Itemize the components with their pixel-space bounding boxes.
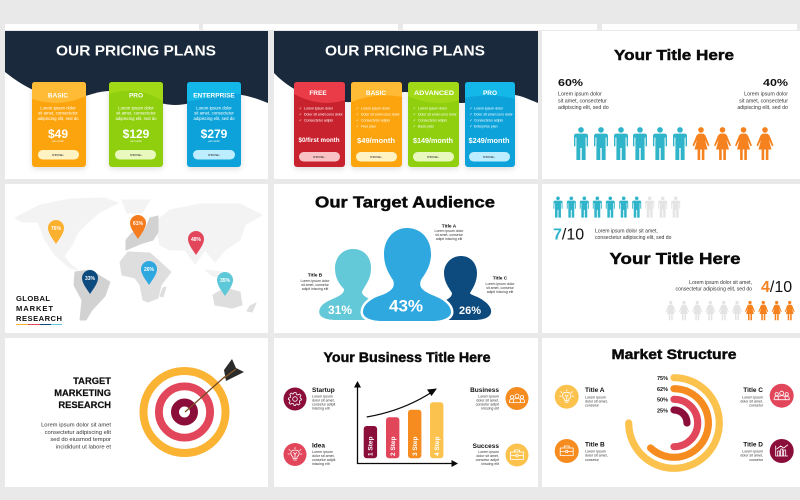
bar chart	[364, 402, 443, 458]
success item	[473, 443, 528, 466]
stat: 40%: 40%	[763, 78, 788, 89]
item: title A	[555, 385, 608, 409]
item: title C: Title C	[743, 387, 763, 394]
text: 4/10 description: consectetur adipiscing elit, sed do	[676, 286, 752, 292]
card: basic: CHOOSE ›	[52, 154, 64, 157]
card: pro	[109, 82, 163, 167]
card: enterprise: per month	[208, 140, 220, 143]
startup item: consetur adipit	[312, 402, 335, 406]
item: title C: consetur	[749, 404, 764, 408]
card: basic: Lorem ipsum dolor	[361, 106, 391, 110]
text: 7/10 description: consectetur adipiscing elit, sed do	[595, 235, 672, 241]
icons: men row	[574, 127, 687, 160]
business item: dolor sit amet,	[476, 398, 499, 402]
card: enterprise: adipiscing elit, sed do	[193, 116, 235, 121]
stat: 60%	[558, 78, 609, 111]
stat: 40%: Lorem ipsum dolor	[744, 92, 788, 98]
arrow: growth curve	[367, 388, 437, 417]
pin: 33%	[82, 270, 98, 294]
pin: 48%: 48%	[191, 237, 202, 243]
text: 7/10 description: Lorem ipsum dolor sit amet,	[595, 228, 658, 234]
heading: Our Target Audience	[315, 194, 495, 212]
label: title B	[301, 272, 330, 291]
card: basic	[351, 82, 402, 167]
card: basic: Dolor sit amet cons dolor	[361, 112, 401, 116]
label: title B: adipit iniscing elit	[302, 287, 328, 291]
card: basic: adipiscing elit, sed do	[37, 116, 79, 121]
card: pro: $249/month	[468, 138, 510, 145]
card: basic: Lorem ipsum dolor	[40, 106, 76, 110]
label: title C: Title C	[493, 276, 508, 282]
panel: pricing plans four tiers	[274, 31, 538, 179]
pin: 61%	[130, 215, 146, 239]
card: free: ✓	[299, 106, 302, 110]
item: title B: dolor sit amet,	[585, 454, 608, 458]
card: advanced: Basic plan	[418, 124, 434, 128]
card: pro: ✓	[470, 112, 472, 116]
card: free: ✓	[299, 118, 302, 122]
card: basic: per month	[52, 140, 64, 143]
item: title C: Lorem ipsum	[742, 396, 763, 400]
label: title A: adipit iniscing elit	[436, 237, 462, 241]
card: advanced: ✓	[413, 124, 416, 128]
pin: 33%: 33%	[85, 276, 96, 282]
heading: TARGET	[73, 375, 111, 386]
card: enterprise: Lorem ipsum dolor	[196, 106, 232, 110]
label: title C: Lorem ipsum dolor	[486, 282, 515, 286]
pin: 26%: 26%	[144, 267, 155, 273]
startup item	[284, 387, 335, 410]
card: free: Lorem ipsum dolor	[304, 106, 334, 110]
card: pro: CHOOSE ›	[483, 156, 495, 159]
card: advanced: Lorem ipsum dolor	[418, 106, 448, 110]
startup item: dolor sit amet,	[312, 398, 335, 402]
dark header wave	[5, 31, 268, 105]
stat: 60%: sit amet, consectetur	[558, 98, 607, 104]
card: enterprise: CHOOSE ›	[208, 154, 220, 157]
heading: OUR PRICING PLANS	[325, 42, 485, 60]
map title: MARKET	[16, 304, 53, 313]
card: advanced: CHOOSE ›	[427, 156, 439, 159]
label: title A	[435, 224, 464, 241]
title underline	[16, 324, 62, 325]
card: basic: BASIC	[366, 90, 386, 97]
top slide strips	[5, 24, 797, 30]
card: free: Consectetur adipis	[304, 118, 333, 122]
pin: 61%: 61%	[133, 221, 144, 227]
body text: incididunt ut labore et	[56, 444, 111, 450]
card: pro: ✓	[470, 118, 472, 122]
panel: business chart	[274, 338, 538, 487]
business item: Business	[470, 387, 499, 394]
card: basic: CHOOSE ›	[370, 156, 382, 159]
chart labels: 25%	[657, 409, 668, 415]
card: pro: ✓	[470, 106, 472, 110]
idea item	[284, 442, 335, 466]
card: free: ✓	[299, 112, 302, 116]
business item: consetur adipit	[476, 402, 499, 406]
bar chart: 1 Step	[368, 436, 374, 456]
map title: RESEARCH	[16, 314, 62, 323]
item: title B: Lorem ipsum	[585, 450, 606, 454]
card: enterprise	[187, 82, 241, 167]
pin: 48%	[188, 231, 204, 255]
heading: Your Business Title Here	[324, 350, 491, 365]
startup item: Startup	[312, 387, 335, 394]
card: pro: PRO	[129, 92, 143, 100]
panel: market structure	[542, 338, 800, 487]
business item: Lorem ipsum	[478, 394, 499, 398]
stat: 60%: 60%	[558, 78, 583, 89]
person A	[363, 228, 451, 321]
card: advanced: ✓	[413, 118, 416, 122]
card: pro: Enterprise plan	[474, 124, 498, 128]
item: title A: Title A	[585, 387, 605, 394]
text: 4/10 description: Lorem ipsum dolor sit amet,	[689, 280, 752, 286]
card: basic: $49/month	[357, 138, 395, 145]
item: title D: dolor sit amet,	[740, 454, 763, 458]
card: basic: sit amet, consectetur	[38, 110, 78, 116]
card: advanced	[408, 82, 459, 167]
card: pro	[465, 82, 515, 167]
item: title A: consetur	[585, 404, 600, 408]
idea item: iniscing elit	[312, 462, 330, 466]
card: advanced: $149/month	[413, 138, 453, 145]
pin: 76%	[48, 220, 64, 244]
value: 43%: 43%	[389, 296, 423, 316]
idea item: dolor sit amet,	[312, 454, 335, 458]
card: pro: Consectetur adipis	[474, 118, 503, 122]
icons: women row	[692, 127, 774, 160]
card: basic: $49	[48, 127, 68, 141]
label: title B: Title B	[308, 272, 323, 278]
label: title A: Title A	[442, 224, 457, 230]
item: title B: Title B	[585, 442, 605, 448]
person B	[319, 249, 385, 320]
success item: Lorem ipsum	[478, 450, 499, 454]
chart labels: 75%	[657, 376, 668, 382]
card: pro: ✓	[470, 124, 472, 128]
item: title A: dolor sit amet,	[585, 400, 608, 404]
card: pro: per month	[130, 140, 142, 143]
label: title B: sit amet, consetur	[301, 283, 330, 287]
bar chart: 2 Step	[390, 436, 397, 456]
item: title A: Lorem ipsum	[585, 396, 606, 400]
item: title C: dolor sit amet,	[740, 400, 763, 404]
idea item: Idea	[312, 442, 325, 450]
card: basic	[32, 82, 86, 167]
heading: Your Title Here	[610, 251, 741, 268]
card: free: FREE	[309, 90, 327, 97]
chart labels: 62%	[657, 387, 668, 393]
heading: RESEARCH	[58, 399, 111, 410]
bar chart: 4 Step	[434, 436, 441, 456]
panel: target audience	[274, 184, 538, 333]
label: title B: Lorem ipsum dolor	[301, 279, 330, 283]
value: 26%: 26%	[459, 305, 481, 317]
item: title C	[740, 384, 794, 408]
card: basic: BASIC	[48, 92, 68, 100]
heading: Your Title Here	[614, 47, 734, 64]
stat: 40%: adipiscing elit, sed do	[737, 105, 788, 111]
card: advanced: Consectetur adipis	[418, 118, 447, 122]
card: basic: Consectetur adipis	[361, 118, 390, 122]
success item: Success	[473, 443, 499, 450]
card: advanced: Dolor sit amet cons dolor	[418, 112, 458, 116]
card: advanced: ✓	[413, 112, 416, 116]
startup item: iniscing elit	[312, 406, 330, 410]
label: title C: adipit iniscing elit	[487, 290, 513, 294]
heading: Market Structure	[612, 347, 737, 362]
item: title B: consetur	[585, 458, 600, 462]
panel: pricing plans three tiers	[5, 31, 268, 179]
card: enterprise: ENTERPRISE	[193, 92, 235, 100]
idea item: consetur adipit	[312, 458, 335, 462]
success item: iniscing elit	[481, 462, 499, 466]
card: enterprise: $279	[201, 127, 228, 141]
label: title A: sit amet, consetur	[435, 233, 464, 237]
business item	[470, 387, 528, 410]
body text: sed do eiusmod tempor	[50, 437, 111, 443]
heading: MARKETING	[54, 387, 111, 398]
stat: 60%: Lorem ipsum dolor	[558, 92, 602, 98]
map title: GLOBAL	[16, 294, 50, 303]
dark header wave	[274, 31, 538, 103]
label: title A: Lorem ipsum dolor	[435, 229, 464, 233]
card: pro: Lorem ipsum dolor	[118, 106, 154, 110]
idea item: Lorem ipsum	[312, 450, 333, 454]
pin: 35%: 35%	[220, 278, 231, 284]
panel: 60/40 people split	[542, 31, 800, 179]
card: basic: ✓	[356, 112, 359, 116]
person C	[430, 256, 491, 320]
startup item: Lorem ipsum	[312, 394, 333, 398]
stat: 40%	[737, 78, 788, 111]
chart labels: 50%	[657, 398, 668, 404]
pin: 76%: 76%	[51, 226, 62, 232]
panel: global market map	[5, 184, 268, 333]
panel: 7/10 and 4/10 people	[542, 184, 800, 333]
icons: 4 of 10 women	[666, 301, 795, 320]
card: pro: Lorem ipsum dolor	[474, 106, 504, 110]
card: basic: ✓	[356, 106, 359, 110]
item: title D	[740, 439, 794, 463]
card: basic: Free plan	[361, 124, 376, 128]
card: pro: CHOOSE ›	[130, 154, 142, 157]
card: pro: Dolor sit amet cons dolor	[474, 112, 514, 116]
stat: 4/10: 4/10	[761, 279, 792, 296]
card: free: Dolor sit amet cons dolor	[304, 112, 344, 116]
stat: 7/10: 7/10	[553, 226, 584, 244]
item: title B	[555, 439, 608, 463]
body text: consectetur adipiscing elit	[45, 430, 111, 436]
business item: iniscing elit	[481, 406, 499, 410]
bar chart: 3 Step	[412, 436, 419, 456]
card: pro: adipiscing elit, sed do	[115, 116, 157, 121]
pin: 35%	[217, 272, 233, 296]
card: free: $0/first month	[298, 137, 340, 144]
item: title D: Title D	[743, 442, 763, 448]
label: title C	[486, 276, 515, 294]
body text: Lorem ipsum dolor sit amet	[41, 422, 111, 428]
panel: target marketing	[5, 338, 268, 487]
stat: 60%: adipiscing elit, sed do	[558, 105, 609, 111]
card: free: CHOOSE ›	[313, 156, 325, 159]
chart axes	[354, 381, 458, 467]
stat: 40%: sit amet, consectetur	[739, 98, 788, 104]
card: pro: PRO	[483, 90, 497, 97]
value: 31%: 31%	[328, 303, 352, 317]
success item: dolor sit amet,	[476, 454, 499, 458]
card: free	[294, 82, 345, 167]
card: advanced: ✓	[413, 106, 416, 110]
radial bar chart	[629, 378, 719, 468]
icon: target with arrow	[144, 359, 244, 453]
card: enterprise: sit amet, consectetur	[194, 110, 234, 116]
success item: consetur adipit	[476, 458, 499, 462]
card: basic: ✓	[356, 118, 359, 122]
label: title C: sit amet, consetur	[486, 286, 515, 290]
card: advanced: ADVANCED	[414, 90, 454, 97]
card: basic: ✓	[356, 124, 359, 128]
world map	[15, 198, 262, 320]
heading: OUR PRICING PLANS	[56, 42, 216, 60]
card: pro: $129	[123, 127, 150, 141]
card: pro: sit amet, consectetur	[116, 110, 156, 116]
pin: 26%	[141, 261, 157, 285]
item: title D: consetur	[749, 458, 764, 462]
icons: 7 of 10 men	[554, 196, 680, 218]
item: title D: Lorem ipsum	[742, 450, 763, 454]
